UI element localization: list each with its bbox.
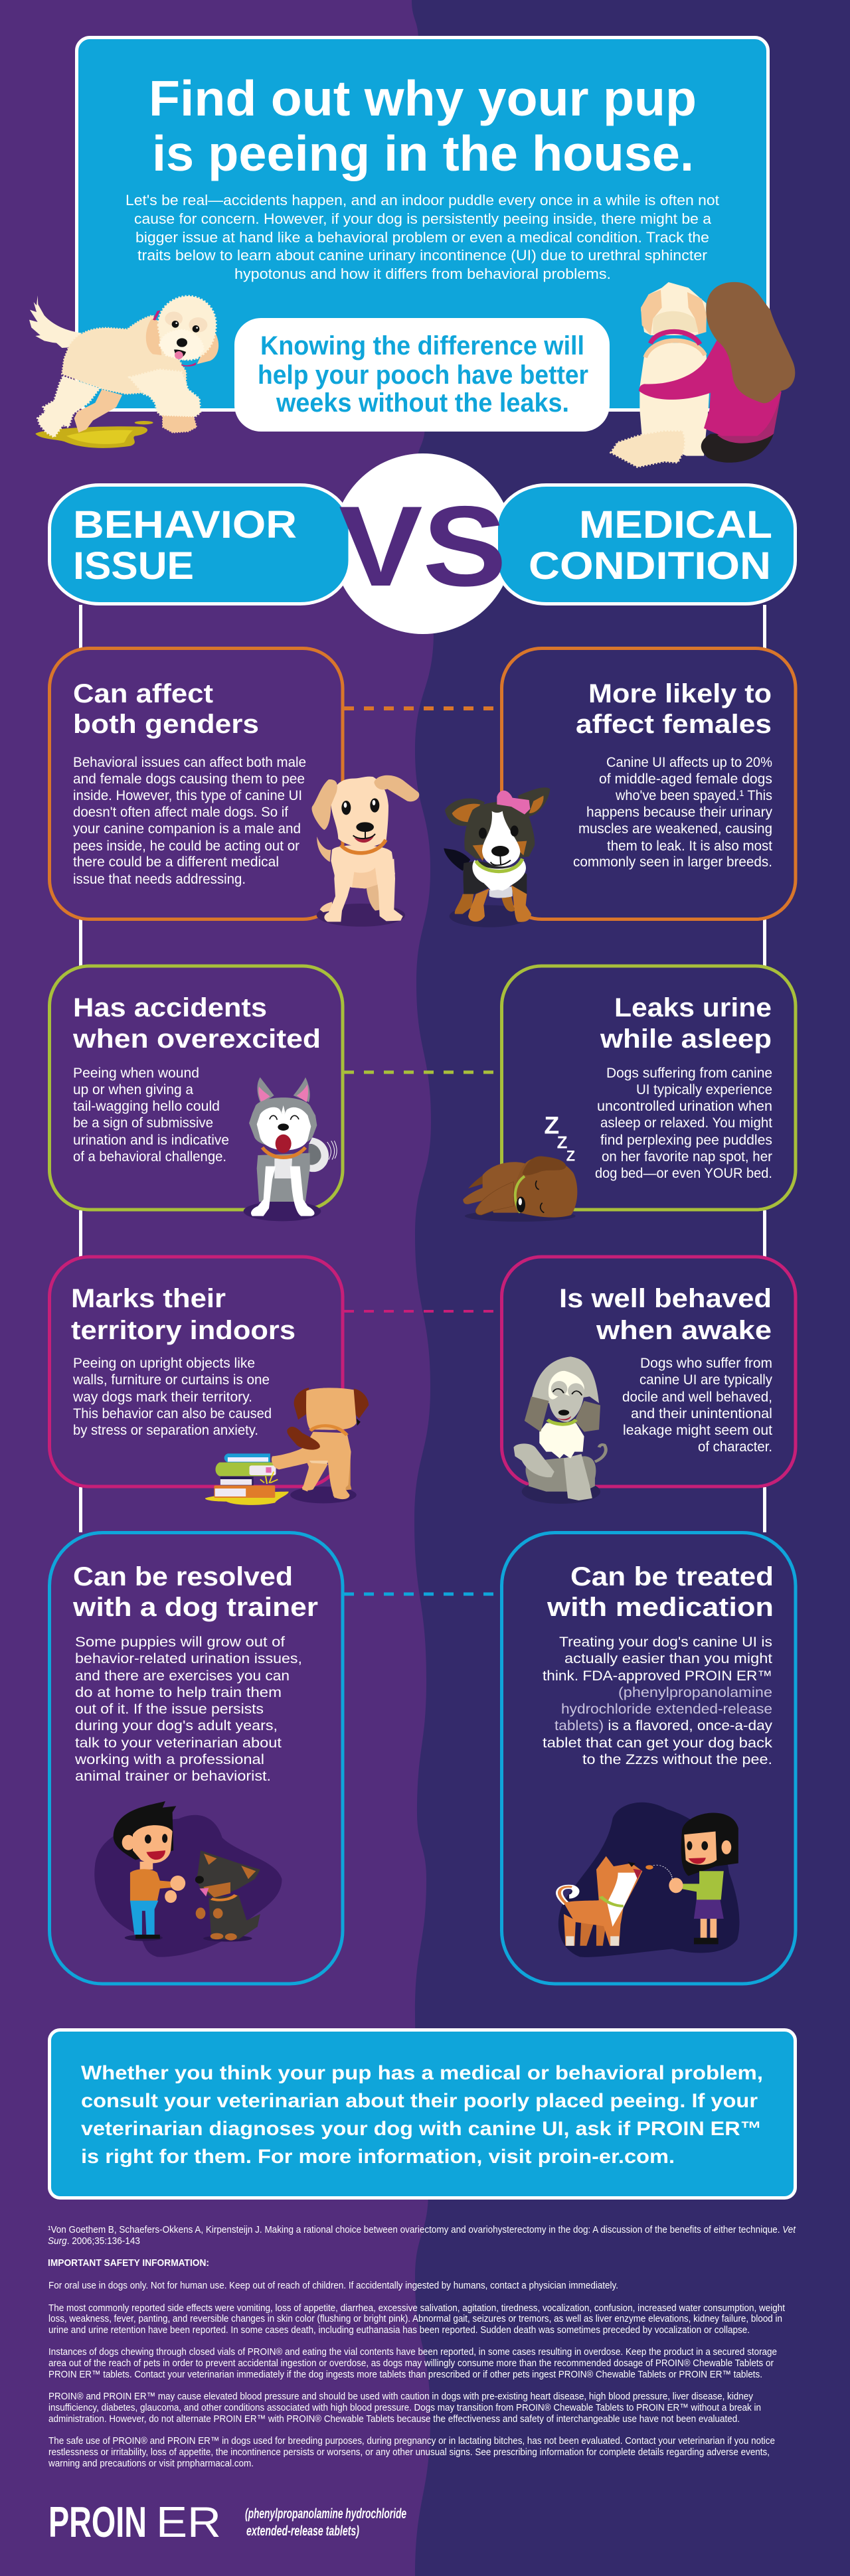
body text: Peeing when wound xyxy=(73,1066,199,1081)
important safety information: The safe use of PROIN® and PROIN ER™ in dogs used for breeding purposes, during pregnancy or in lactating bitches, has not been evaluated. Contact your veterinarian if you notice xyxy=(48,2435,775,2447)
heading pill: behavior issue: BEHAVIOR xyxy=(73,503,297,546)
panel: can be treated with medication xyxy=(502,1532,796,1984)
closing call-to-action panel: veterinarian diagnoses your dog with canine UI, ask if PROIN ER™ xyxy=(81,2118,762,2140)
callout: knowing the difference: help your pooch have better xyxy=(258,361,588,390)
body text: leakage might seem out xyxy=(623,1423,772,1438)
body text xyxy=(73,755,306,887)
hero panel xyxy=(77,37,768,410)
body text: muscles are weakened, causing xyxy=(578,821,772,837)
body text: on her favorite nap spot, her xyxy=(602,1149,772,1165)
panel: can affect both genders: Can affect xyxy=(73,679,213,708)
body text: tail-wagging hello could xyxy=(73,1099,220,1114)
body text xyxy=(543,1635,773,1767)
body text: Behavioral issues can affect both male xyxy=(73,755,306,770)
intro text: hypotonus and how it differs from behavioral problems. xyxy=(234,266,611,282)
body text: of middle-aged female dogs xyxy=(599,771,772,787)
closing call-to-action panel: Whether you think your pup has a medical or behavioral problem, xyxy=(81,2062,763,2084)
intro text: bigger issue at hand like a behavioral problem or even a medical condition. Track the xyxy=(135,229,709,246)
important safety information: urine and urine retention have been reported. In some cases death, including euthanasia has been reported. Sudden death was sometimes preceded by vocalization or collapse. xyxy=(48,2324,750,2336)
heading pill: medical condition: CONDITION xyxy=(529,544,771,588)
row 1 connector dashes xyxy=(344,706,501,710)
important safety information: PROIN® and PROIN ER™ may cause elevated blood pressure and should be used with caution in dogs with pre-existing heart disease, high blood pressure, liver disease, kidney xyxy=(48,2391,753,2402)
body text: urination and is indicative xyxy=(73,1133,229,1148)
body text: asleep or relaxed. You might xyxy=(600,1115,772,1131)
intro text: Let's be real—accidents happen, and an indoor puddle every once in a while is often not xyxy=(126,192,719,208)
white connector lines xyxy=(79,605,766,1532)
body text: think. FDA-approved PROIN ER™ xyxy=(543,1668,772,1684)
closing call-to-action panel xyxy=(49,2030,796,2198)
body text xyxy=(74,1635,302,1784)
body text: during your dog's adult years, xyxy=(75,1718,278,1733)
icon: boy with rottweiler puppy xyxy=(94,1801,282,1957)
body text: animal trainer or behaviorist. xyxy=(75,1769,271,1784)
row 2 connector dashes xyxy=(344,1070,501,1074)
important safety information xyxy=(48,2257,786,2469)
body text: uncontrolled urination when xyxy=(597,1099,772,1114)
title xyxy=(149,70,697,181)
important safety information: Instances of dogs chewing through closed vials of PROIN® and eating the vial contents have been reported, in some cases resulting in overdose. Keep the product in a secured storage xyxy=(48,2346,777,2358)
reference citation: Surg. 2006;35:136-143 xyxy=(48,2235,140,2247)
row 3 connector dashes xyxy=(344,1310,501,1313)
callout: knowing the difference xyxy=(234,318,610,432)
icon: barking husky wagging tail xyxy=(244,1078,337,1221)
panel: can affect both genders: both genders xyxy=(73,710,259,739)
body text: working with a professional xyxy=(74,1752,264,1767)
body text: inside. However, this type of canine UI xyxy=(73,788,302,803)
body text: do at home to help train them xyxy=(75,1685,282,1700)
body text: doesn't often affect male dogs. So if xyxy=(73,805,288,820)
body text xyxy=(573,755,772,870)
icon: sleeping brown dog with Zzz: Z xyxy=(557,1132,568,1152)
body text: your canine companion is a male and xyxy=(73,821,301,837)
body text: out of it. If the issue persists xyxy=(75,1702,264,1717)
important safety information: IMPORTANT SAFETY INFORMATION: xyxy=(48,2257,209,2269)
body text: dog bed—or even YOUR bed. xyxy=(595,1166,772,1181)
heading pill: behavior issue xyxy=(49,485,350,604)
body text: hydrochloride extended-release xyxy=(561,1702,772,1717)
icon: puppy with pink bow xyxy=(444,787,550,927)
intro text xyxy=(126,192,719,282)
important safety information: warning and precautions or visit prnpharmacal.com. xyxy=(48,2458,254,2469)
callout: knowing the difference: weeks without the leaks. xyxy=(276,388,569,418)
panel: can be resolved with a dog trainer: Can be resolved xyxy=(73,1562,293,1591)
callout: knowing the difference: Knowing the difference will xyxy=(260,331,584,361)
closing call-to-action panel: is right for them. For more information, visit proin-er.com. xyxy=(81,2146,675,2168)
panel: leaks urine while asleep xyxy=(502,966,796,1210)
reference citation xyxy=(48,2224,796,2247)
icon: fluffy dog with puddle xyxy=(29,295,218,448)
intro text: cause for concern. However, if your dog is persistently peeing inside, there might be a xyxy=(134,210,712,227)
body text: walls, furniture or curtains is one xyxy=(72,1372,270,1388)
icon: long-haired grey dog xyxy=(513,1356,606,1504)
body text: Treating your dog's canine UI is xyxy=(559,1635,772,1650)
body text: be a sign of submissive xyxy=(73,1115,213,1131)
logo: PROIN ER: ER xyxy=(156,2498,221,2546)
panel: can be treated with medication: with medication xyxy=(547,1593,774,1622)
body text: Some puppies will grow out of xyxy=(75,1635,285,1650)
body text xyxy=(73,1066,229,1165)
icon: dog peeing on stack of books xyxy=(205,1388,369,1505)
important safety information: loss, weakness, fever, panting, and reversible changes in skin color (flushing or bright pink). Abnormal gait, seizures or tremors, as well as liver enzyme elevations, kidney failure, blood in xyxy=(48,2313,782,2324)
body text: (phenylpropanolamine xyxy=(618,1685,772,1700)
body text xyxy=(622,1356,772,1455)
body text: who've been spayed.¹ This xyxy=(615,788,772,803)
body text: tablet that can get your dog back xyxy=(543,1735,773,1751)
panel: more likely to affect females: More likely to xyxy=(588,679,772,708)
body text: them to leak. It is also most xyxy=(607,839,772,854)
body text: UI typically experience xyxy=(636,1082,772,1097)
panel: leaks urine while asleep: while asleep xyxy=(600,1024,772,1054)
logo descriptor: extended-release tablets) xyxy=(246,2524,359,2539)
icon: labrador puppy xyxy=(312,775,419,927)
icon: girl hugging dog xyxy=(611,282,795,467)
logo: PROIN ER: PROIN xyxy=(48,2498,147,2546)
body text: commonly seen in larger breeds. xyxy=(573,854,772,870)
panel: leaks urine while asleep: Leaks urine xyxy=(614,993,772,1022)
body text: and their unintentional xyxy=(631,1406,772,1421)
body text: Canine UI affects up to 20% xyxy=(606,755,772,770)
logo descriptor xyxy=(245,2506,406,2539)
body text: and female dogs causing them to pee xyxy=(73,771,305,787)
logo descriptor: (phenylpropanolamine hydrochloride xyxy=(245,2506,406,2522)
panel: can be resolved with a dog trainer: with a dog trainer xyxy=(72,1593,318,1622)
important safety information: For oral use in dogs only. Not for human use. Keep out of reach of children. If accidentally ingested by humans, contact a physician immediately. xyxy=(48,2280,618,2291)
vs circle xyxy=(333,453,513,634)
icon: sleeping brown dog with Zzz: Z xyxy=(544,1111,559,1139)
panel: can be treated with medication: Can be treated xyxy=(570,1562,774,1591)
intro text: traits below to learn about canine urinary incontinence (UI) due to urethral sphincter xyxy=(137,247,707,264)
row 4 connector dashes xyxy=(344,1592,501,1596)
closing call-to-action panel: consult your veterinarian about their poorly placed peeing. If your xyxy=(81,2090,758,2112)
heading pill: medical condition: MEDICAL xyxy=(579,503,772,546)
vs lettering: VS xyxy=(339,483,507,610)
important safety information: The most commonly reported side effects were vomiting, loss of appetite, diarrhea, excessive salivation, agitation, tiredness, vocalization, confusion, increased water consumption, weight xyxy=(48,2302,786,2314)
panel: is well behaved when awake: when awake xyxy=(596,1316,772,1345)
body text: way dogs mark their territory. xyxy=(72,1390,252,1405)
icon: girl tossing treat to shiba xyxy=(558,1803,739,1957)
body text: to the Zzzs without the pee. xyxy=(582,1752,772,1767)
icon: sleeping brown dog with Zzz xyxy=(463,1111,577,1222)
important safety information: area out of the reach of pets in order to prevent accidental ingestion or overdose, as dogs may willingly consume more than the recommended dosage of PROIN® Chewable Tablets or xyxy=(48,2358,774,2369)
panel: marks their territory indoors: Marks their xyxy=(71,1284,226,1313)
important safety information: insufficiency, diabetes, glaucoma, and other conditions associated with high blood pressure. Dogs may transition from PROIN® Chewable Tablets to PROIN ER™ without a break in xyxy=(48,2402,761,2413)
reference citation: ¹Von Goethem B, Schaefers-Okkens A, Kirpensteijn J. Making a rational choice between ovariectomy and ovariohysterectomy in the dog: A discussion of the benefits of either technique. Vet xyxy=(48,2224,796,2235)
panel: has accidents when overexcited: when overexcited xyxy=(72,1024,321,1054)
heading pill: behavior issue: ISSUE xyxy=(73,544,194,588)
body text: issue that needs addressing. xyxy=(73,872,246,887)
body text xyxy=(72,1356,272,1438)
body text: Dogs suffering from canine xyxy=(606,1066,772,1081)
panel: is well behaved when awake xyxy=(502,1257,796,1487)
icon: sleeping brown dog with Zzz: Z xyxy=(566,1147,575,1164)
body text: docile and well behaved, xyxy=(622,1390,772,1405)
body text: of character. xyxy=(698,1439,772,1455)
body text: talk to your veterinarian about xyxy=(75,1735,282,1751)
body text: tablets) is a flavored, once-a-day xyxy=(554,1718,773,1733)
panel: marks their territory indoors xyxy=(49,1257,343,1487)
important safety information: restlessness or irritability, loss of appetite, the incontinence persists or worsens, or any other unusual signs. See prescribing information for complete details regarding adverse events, xyxy=(48,2447,770,2458)
body text: Peeing on upright objects like xyxy=(73,1356,255,1371)
body text: Dogs who suffer from xyxy=(640,1356,772,1371)
title: Find out why your pup xyxy=(149,70,697,126)
body text: by stress or separation anxiety. xyxy=(73,1423,258,1438)
body text xyxy=(595,1066,772,1181)
panel: has accidents when overexcited: Has accidents xyxy=(73,993,267,1022)
heading pill: medical condition xyxy=(497,485,796,604)
panel: is well behaved when awake: Is well behaved xyxy=(559,1284,772,1313)
body text: pees inside, he could be acting out or xyxy=(73,839,299,854)
panel: can be resolved with a dog trainer xyxy=(49,1532,343,1984)
body text: find perplexing pee puddles xyxy=(600,1133,772,1148)
panel: has accidents when overexcited xyxy=(49,966,343,1210)
body text: and there are exercises you can xyxy=(75,1668,290,1684)
panel: more likely to affect females xyxy=(502,648,796,919)
important safety information: PROIN ER™ tablets. Contact your veterinarian immediately if the dog ingests more tablets than prescribed or if other pets ingest PROIN® Chewable Tablets or PROIN ER™ tablets. xyxy=(48,2369,762,2380)
body text: up or when giving a xyxy=(73,1082,193,1097)
body text: happens because their urinary xyxy=(586,805,772,820)
body text: behavior-related urination issues, xyxy=(75,1651,302,1666)
important safety information: administration. However, do not alternate PROIN ER™ with PROIN® Chewable Tablets because the effectiveness and safety of interchangeable use have not been evaluated. xyxy=(48,2413,740,2425)
body text: actually easier than you might xyxy=(564,1651,772,1666)
body text: This behavior can also be caused xyxy=(73,1406,272,1421)
body text: of a behavioral challenge. xyxy=(73,1149,226,1165)
panel: can affect both genders xyxy=(49,648,343,919)
body text: canine UI are typically xyxy=(639,1372,772,1388)
title: is peeing in the house. xyxy=(152,125,694,181)
panel: more likely to affect females: affect females xyxy=(576,710,772,739)
body text: there could be a different medical xyxy=(73,854,279,870)
panel: marks their territory indoors: territory indoors xyxy=(71,1316,296,1345)
